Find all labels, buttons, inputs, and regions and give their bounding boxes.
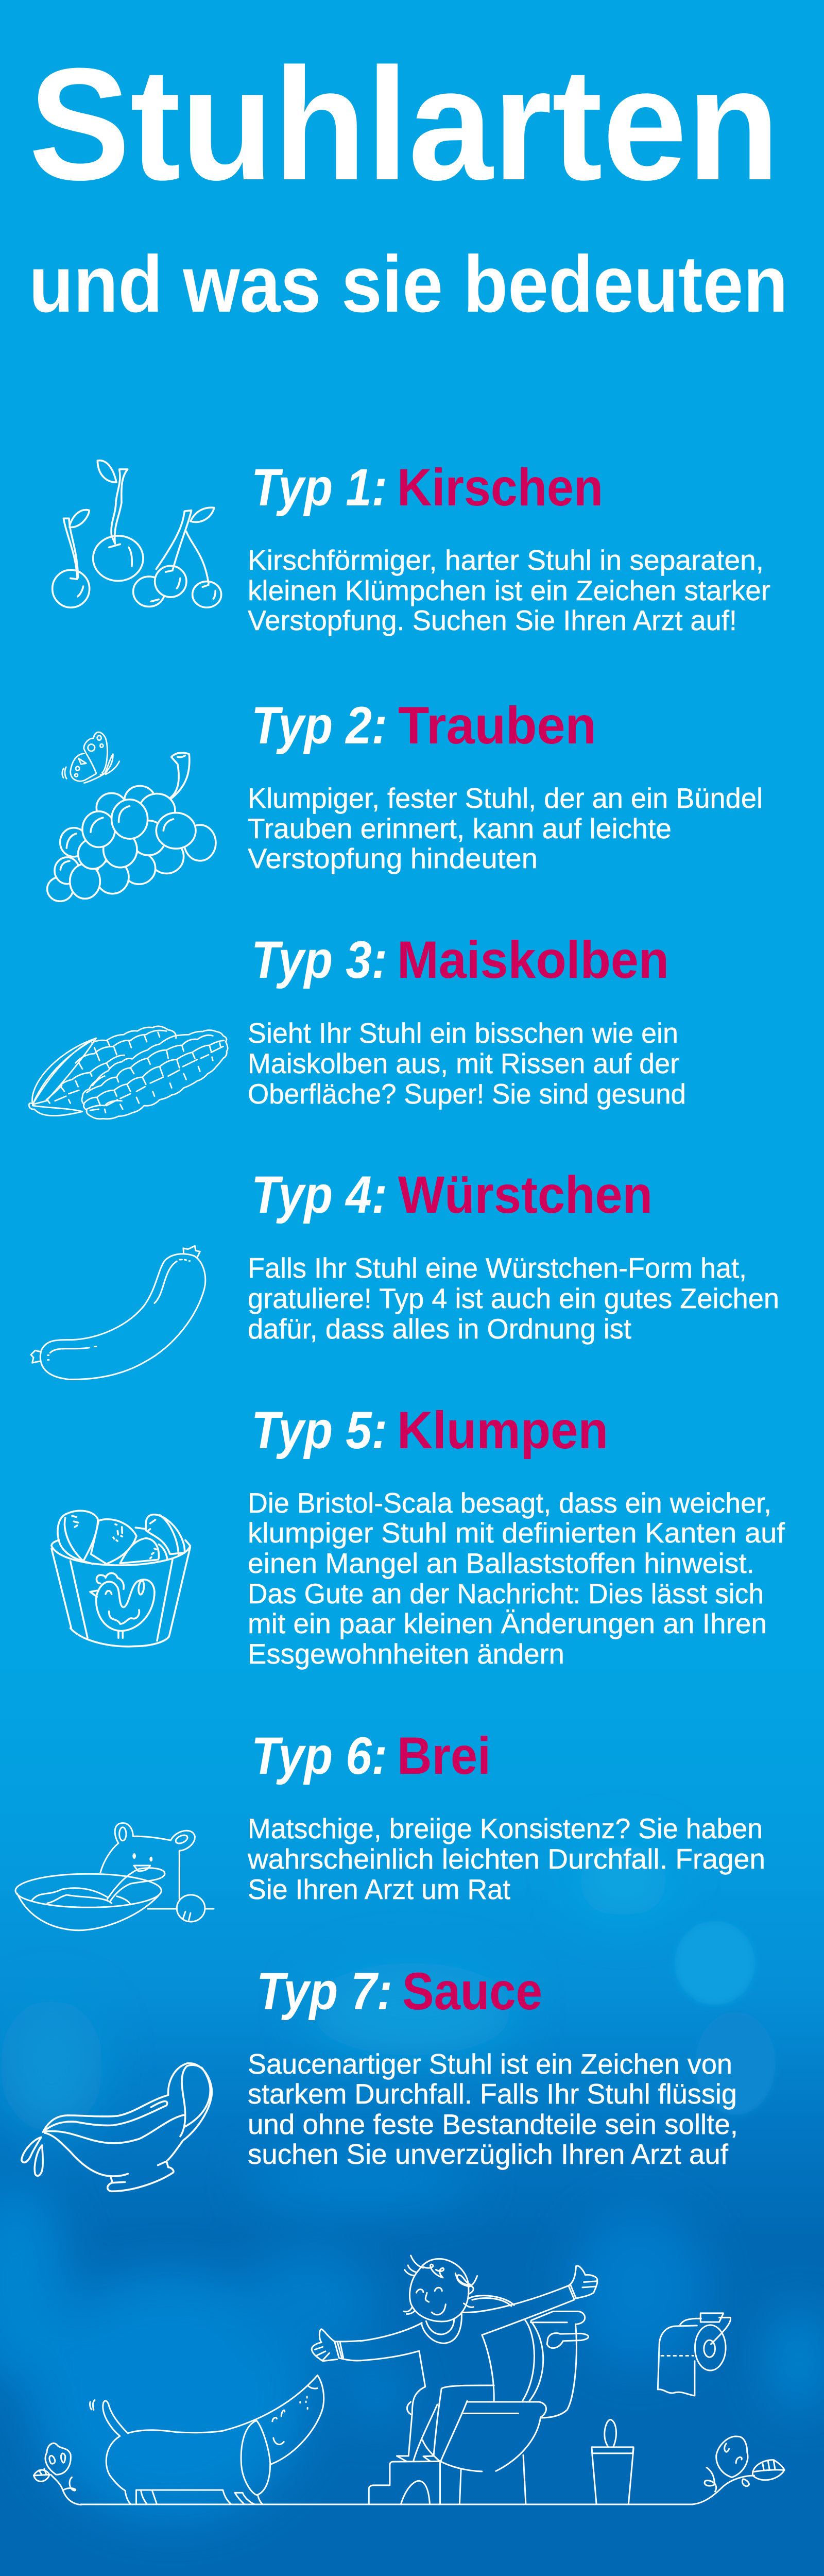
text block: Typ 3: Maiskolben aus, mit Rissen auf der [248,1047,679,1079]
text block: Typ 5: mit ein paar kleinen Änderungen an Ihren [248,1607,767,1639]
text block: Typ 5: Essgewohnheiten ändern [248,1638,564,1670]
text block: Typ 3: Sieht Ihr Stuhl ein bisschen wie ein [248,1017,678,1049]
heading: Typ 7 [256,1962,542,2021]
text block: Typ 6 [247,1812,765,1905]
heading: Typ 5: Typ 5: [251,1401,387,1460]
text block: Typ 5: einen Mangel an Ballaststoffen hinweist. [248,1547,754,1579]
heading: Typ 4: Würstchen [398,1165,653,1224]
text block: Typ 1: kleinen Klümpchen ist ein Zeichen starker [248,574,770,606]
text block: Typ 2: Klumpiger, fester Stuhl, der an ein Bündel [248,782,763,814]
ground line [81,2504,693,2505]
heading: Typ 7: Typ 7: [256,1962,392,2021]
heading: Typ 6: Brei [397,1726,491,1785]
heading: Typ 3: Typ 3: [251,930,387,989]
icon: gravy boat [22,2063,212,2191]
icon: cherries [53,461,221,607]
text block: Typ 5: klumpiger Stuhl mit definierten Kanten auf [248,1517,785,1549]
text block: Typ 7 [248,2048,738,2170]
icon: sausage [31,1246,205,1379]
title [29,35,788,329]
heading: Typ 3: Maiskolben [397,930,669,989]
text block: Typ 2: Trauben erinnert, kann auf leichte [248,812,672,844]
heading: Typ 6 [251,1726,491,1785]
toilet [422,2296,588,2504]
text block: Typ 6: wahrscheinlich leichten Durchfall. Fragen [247,1843,765,1875]
step stool [369,2461,440,2504]
panel: Typ 5 Klumpen [52,1401,785,1670]
person on toilet [312,2256,597,2461]
heading: Typ 1: Typ 1: [251,458,387,517]
text block: Typ 7: und ohne feste Bestandteile sein sollte, [248,2108,738,2140]
text block: Typ 5: Das Gute an der Nachricht: Dies lässt sich [248,1578,764,1609]
text block: Typ 1: Kirschförmiger, harter Stuhl in separaten, [248,544,764,576]
text block: Typ 1: Verstopfung. Suchen Sie Ihren Arzt auf! [248,604,737,636]
text block: Typ 7: Saucenartiger Stuhl ist ein Zeichen von [248,2048,732,2080]
text block: Typ 6: Matschige, breiige Konsistenz? Sie haben [248,1812,763,1844]
icon: grapes and butterfly [47,732,216,901]
flower left [34,2443,81,2505]
panel: Typ 2 Trauben [47,696,763,901]
icon: bucket with lumps [52,1511,190,1647]
text block: Typ 1 [248,544,770,636]
text block: Typ 2: Verstopfung hindeuten [248,842,538,874]
panel: Typ 4 Würstchen [31,1165,779,1379]
heading: Typ 4: Typ 4: [251,1165,387,1224]
title: Stuhlarten [29,35,780,213]
panel: Typ 3 Maiskolben [29,930,686,1119]
heading: Typ 5: Klumpen [397,1401,608,1460]
dog [90,2375,324,2504]
heading: Typ 1: Kirschen [397,458,603,517]
panel: Typ 7 Sauce [22,1962,738,2191]
heading: Typ 2: Trauben [398,696,596,755]
text block: Typ 6: Sie Ihren Arzt um Rat [248,1873,510,1905]
text block: Typ 3: Oberfläche? Super! Sie sind gesund [248,1078,686,1110]
heading: Typ 7: Sauce [402,1962,542,2021]
text block: Typ 7: starkem Durchfall. Falls Ihr Stuhl flüssig [248,2078,737,2110]
heading: Typ 2 [251,696,596,755]
heading: Typ 3 [251,930,669,989]
icon: bear with porridge bowl [15,1823,214,1930]
toilet brush [592,2419,633,2504]
text block: Typ 4 [248,1252,779,1345]
panel: Typ 1 Kirschen [53,458,770,636]
toilet paper roll [658,2313,731,2396]
text block: Typ 2 [248,782,763,874]
text block: Typ 4: dafür, dass alles in Ordnung ist [248,1313,631,1345]
heading: Typ 2: Typ 2: [251,696,387,755]
text block: Typ 7: suchen Sie unverzüglich Ihren Arzt auf [248,2138,729,2170]
heading: Typ 1 [251,458,603,517]
text block: Typ 5: Die Bristol-Scala besagt, dass ein weicher, [248,1487,771,1519]
heading: Typ 4 [251,1165,653,1224]
heading: Typ 6: Typ 6: [251,1726,387,1785]
icon: corn cob [29,1026,228,1119]
text block: Typ 4: Falls Ihr Stuhl eine Würstchen-Form hat, [248,1252,747,1284]
text block: Typ 5 [248,1487,785,1670]
illustration: bathroom scene [34,2256,784,2505]
flower right [693,2436,784,2504]
heading: Typ 5 [251,1401,608,1460]
panel: Typ 6 Brei [15,1726,765,1930]
text block: Typ 3 [248,1017,686,1110]
text block: Typ 4: gratuliere! Typ 4 ist auch ein gutes Zeichen [248,1282,779,1314]
